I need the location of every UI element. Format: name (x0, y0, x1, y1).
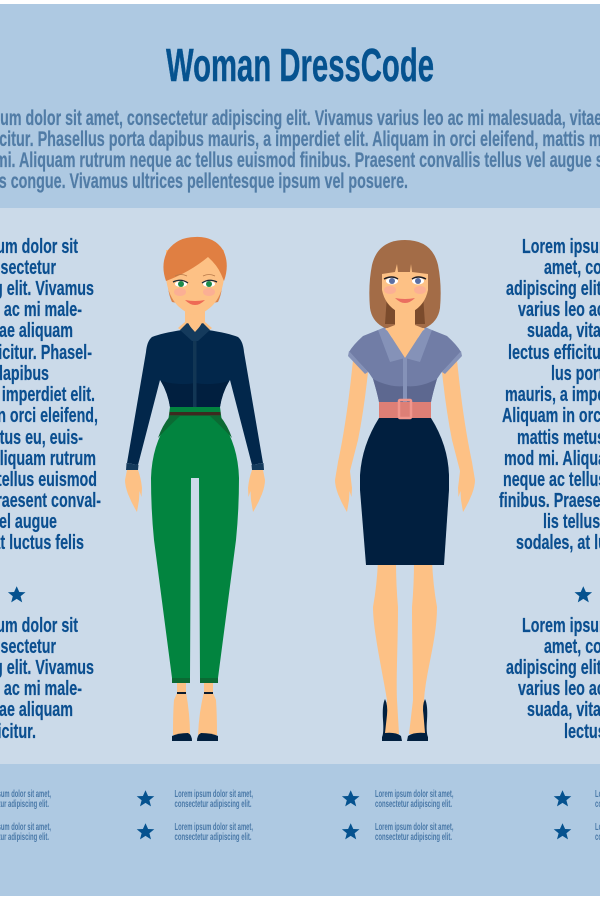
footer item group right (595, 788, 600, 843)
belt (170, 412, 220, 416)
feet and heels (173, 683, 190, 735)
left star icon (8, 586, 25, 602)
head with brown bob hair (369, 240, 441, 345)
footer star icons column 3 (554, 790, 571, 839)
shoes (382, 699, 428, 741)
hands (125, 470, 265, 512)
skin of the neckline (385, 322, 425, 358)
footer star icons column 2 (342, 790, 360, 839)
neck (178, 305, 212, 342)
blue blouse (349, 330, 461, 402)
eyes (386, 278, 398, 284)
footer item group 3 (375, 788, 454, 843)
left text block 2 (0, 614, 94, 743)
right star icon (574, 586, 592, 602)
footer item group 2: Lorem ipsum dolor sit amet, (174, 821, 253, 833)
figure: woman in green trousers (125, 237, 265, 741)
footer item group 3: Lorem ipsum dolor sit amet, (375, 788, 454, 800)
arms and hands (335, 360, 475, 512)
footer item group 3: Lorem ipsum dolor sit amet, (375, 821, 454, 833)
footer star icons column 1 (137, 790, 154, 839)
right text block 2 (506, 614, 600, 743)
header panel (0, 4, 600, 208)
eyes (175, 281, 187, 287)
title: Woman DressCode (166, 39, 434, 91)
mouth (395, 298, 415, 303)
pink belt (379, 400, 431, 418)
footer item group 3: consectetur adipiscing elit. (375, 831, 452, 843)
navy shirt (127, 323, 263, 465)
footer panel (0, 764, 600, 896)
footer item group 3: consectetur adipiscing elit. (375, 798, 452, 810)
footer item group 2: consectetur adipiscing elit. (174, 831, 252, 843)
footer item group 2: consectetur adipiscing elit. (174, 798, 252, 810)
footer item group 2: Lorem ipsum dolor sit amet, (174, 788, 253, 800)
cheeks (384, 286, 396, 294)
middle panel background (0, 208, 600, 764)
right text block 1 (499, 235, 600, 554)
intro paragraph (0, 106, 600, 193)
figure: woman in navy skirt (335, 240, 475, 741)
footer item group left (0, 788, 51, 843)
cheeks (174, 288, 186, 296)
green trousers (151, 407, 239, 678)
left text block 1 (0, 235, 101, 554)
legs (373, 560, 437, 734)
navy skirt (360, 418, 449, 565)
head with short orange hair (163, 237, 227, 315)
footer item group 2 (174, 788, 253, 843)
mouth (185, 300, 205, 305)
